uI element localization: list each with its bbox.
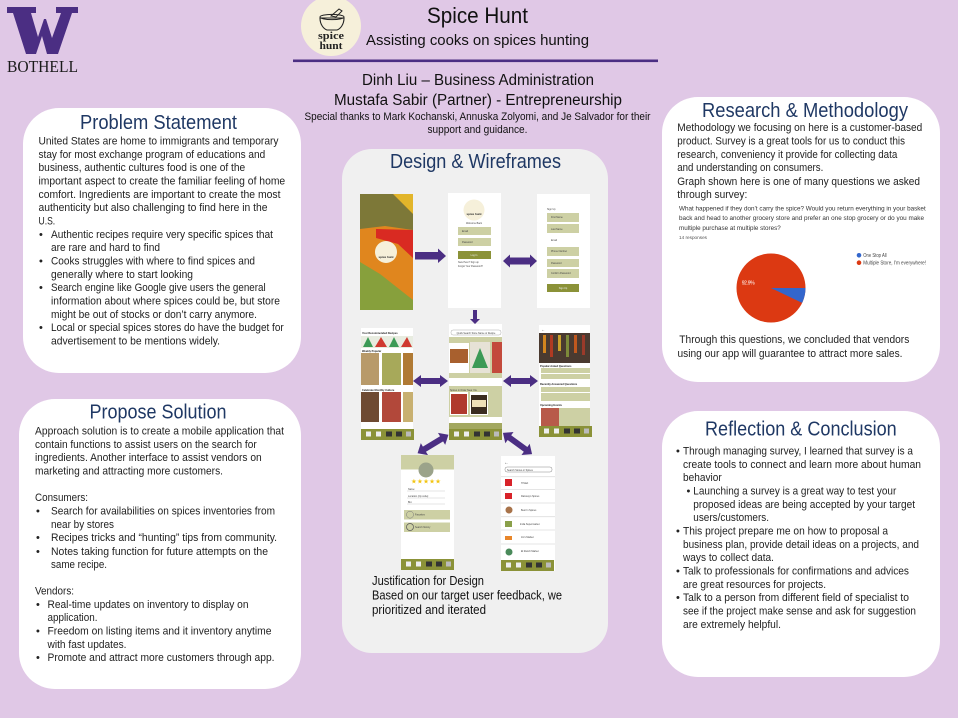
- wireframe: profile screen: Location (zip code):: [408, 495, 429, 498]
- wireframe: profile screen: Name:: [408, 488, 415, 491]
- arrow: recipes to home: [413, 375, 448, 387]
- text: problem statement body: [38, 136, 285, 348]
- text: propose solution body: marketing and attracting more customers.: [35, 466, 223, 478]
- text: problem statement body: Search engine like Google give users the general: [51, 282, 266, 294]
- text: propose solution body: Real-time updates on inventory to display on: [48, 599, 248, 611]
- text: methodology body: research, conveniency it provide for collecting data: [677, 149, 898, 161]
- text: propose solution body: Notes taking function for future attempts on the: [51, 546, 268, 558]
- wireframe: sign up screen: Confirm Password: [551, 272, 571, 275]
- text: propose solution body: ingredients. Another interface to assist vendors on: [35, 452, 262, 464]
- wireframe: home screen: [449, 324, 502, 440]
- text: propose solution body: Approach solution is to create a mobile application that: [35, 426, 284, 438]
- text: propose solution body: Recipes tricks and “hunting” tips from community.: [51, 532, 277, 544]
- text: problem statement body: •: [39, 322, 43, 334]
- wireframe: store list screen: Jin's Market: [521, 536, 534, 539]
- text: problem statement body: generally where to start looking: [51, 269, 193, 281]
- wireframe: recipes screen: Celebrate Monthly Culture: [362, 388, 395, 392]
- wireframe: home screen: Quick Search Store Name or Recipe: [457, 332, 496, 335]
- text: problem statement body: •: [39, 256, 43, 268]
- text: propose solution body: contain functions to assist users on the search for: [35, 439, 257, 451]
- text: propose solution body: [35, 426, 284, 664]
- text: problem statement body: Cooks struggles with where to find spices and: [51, 256, 255, 268]
- text: reflection body: This project prepare me on how to proposal a: [683, 526, 889, 538]
- heading: propose solution: Propose Solution: [90, 402, 226, 424]
- wireframe: sign up screen: Email: [551, 239, 557, 242]
- wireframe: recipes screen: [361, 328, 414, 440]
- text: problem statement body: information about where spices could be, but store: [51, 296, 280, 308]
- text: reflection body: Talk to professionals for confirmations and advices: [683, 566, 909, 578]
- text: propose solution body: same recipe.: [51, 559, 107, 571]
- text: reflection body: Launching a survey is a great way to test your: [693, 486, 897, 498]
- text: reflection body: create tools to connect and learn more about human: [683, 459, 921, 471]
- text: propose solution body: Promote and attract more customers through app.: [48, 652, 274, 664]
- text: problem statement body: stay for most exchange program of educations and: [38, 149, 265, 161]
- subtitle: Assisting cooks on spices hunting: [366, 32, 589, 49]
- text: problem statement body: •: [39, 282, 43, 294]
- chart: survey pie: multiple purchase at multiple stores?: [679, 225, 781, 232]
- wireframe: login screen: New Here? Sign up: [458, 261, 479, 264]
- text: problem statement body: U.S.: [38, 216, 55, 228]
- authors and thanks: support and guidance.: [428, 124, 528, 136]
- text: justification for design: prioritized and iterated: [372, 603, 486, 617]
- panel: propose solution: [19, 399, 301, 689]
- wireframe: login screen: spice hunt: [466, 212, 482, 216]
- text: reflection body: •: [676, 446, 680, 458]
- wireframe: splash screen: spice hunt: [378, 255, 394, 259]
- text: methodology body: Graph shown here is one of many questions we asked: [677, 176, 920, 188]
- wireframe: store list screen: El Ranch Market: [521, 550, 539, 553]
- chart: survey pie: [679, 206, 926, 322]
- wireframe: sign up screen: [537, 194, 590, 308]
- arrow: home to community: [503, 375, 538, 387]
- logo: UW Bothell: [7, 7, 78, 76]
- text: reflection body: •: [676, 526, 680, 538]
- wireframe: login screen: [448, 193, 501, 308]
- text: problem statement body: might be out of stocks or don’t carry anymore.: [51, 309, 257, 321]
- wireframe: community screen: Popular Asked Questions: [540, 364, 572, 368]
- text: problem statement body: authenticity but also challenging to find here in the: [38, 202, 268, 214]
- chart: survey pie: Multiple Store, I'm everywhere!: [863, 260, 926, 266]
- wireframe: sign up screen: Phone Number: [551, 250, 567, 253]
- text: reflection body: ways to collect data.: [682, 552, 774, 564]
- wireframe: home screen: Spices in Order Near You: [450, 389, 478, 392]
- wireframe: sign up screen: Password: [551, 262, 562, 265]
- text: problem statement body: important aspect to create the familiar feeling of home: [38, 176, 285, 188]
- wireframe: sign up screen: Last Name: [551, 228, 563, 231]
- authors and thanks: [304, 72, 651, 136]
- text: methodology body: [677, 122, 922, 201]
- arrow: login to home: [470, 310, 480, 324]
- text: propose solution body: near by stores: [51, 519, 114, 531]
- text: propose solution body: •: [36, 626, 40, 638]
- chart: survey pie: 92.9%: [742, 281, 755, 287]
- text: reflection body: •: [676, 592, 680, 604]
- text: reflection body: •: [686, 486, 690, 498]
- chart: survey pie: One Stop All: [863, 253, 887, 259]
- text: problem statement body: comfort. Ingredients are important to create the most: [38, 189, 280, 201]
- panel: reflection and conclusion: [662, 411, 940, 677]
- wireframe: store list screen: ←: [504, 460, 509, 466]
- text: methodology body: through survey:: [677, 189, 747, 201]
- heading: design and wireframes: Design & Wireframes: [390, 151, 561, 173]
- wireframe: sign up screen: First Name: [551, 216, 563, 219]
- text: reflection body: are great resources for projects.: [683, 579, 826, 591]
- text: reflection body: proposed ideas are being accepted by your target: [693, 499, 915, 511]
- wireframe: login screen: Forgot Your Password?: [458, 265, 484, 268]
- wireframe: recipes screen: Weekly Popular: [362, 349, 381, 353]
- wireframe: login screen: Log In: [471, 254, 478, 257]
- wireframe: login screen: Welcome Back: [466, 222, 483, 225]
- wireframe: profile screen: [401, 455, 454, 570]
- text: propose solution body: •: [36, 532, 40, 544]
- wireframe: community screen: ←: [541, 327, 545, 332]
- wireframe: splash screen: [360, 194, 413, 310]
- arrow: splash to login: [415, 248, 446, 263]
- wireframe: profile screen: ★★★★★: [411, 478, 441, 486]
- chart: survey pie: What happened if they don’t carry the spice? Would you return everything in your basket: [679, 206, 926, 212]
- text: justification for design: Justification for Design: [372, 574, 484, 588]
- wireframe: store list screen: Ramsay's Spices: [521, 495, 540, 498]
- arrow: login to sign up: [503, 254, 537, 268]
- heading: reflection and conclusion: Reflection & Conclusion: [705, 418, 897, 440]
- text: problem statement body: United States are home to immigrants and temporary: [38, 136, 279, 148]
- text: reflection body: see if the project make sense and ask for suggestion: [683, 606, 916, 618]
- chart: survey pie: 14 responses: [679, 235, 708, 241]
- text: propose solution body: Vendors:: [35, 586, 74, 598]
- wireframe: login screen: Password: [462, 241, 473, 244]
- panel: problem statement: [23, 108, 301, 373]
- text: justification for design: [372, 574, 562, 617]
- text: reflection body: Talk to a person from different field of specialist to: [683, 592, 909, 604]
- logo: Spice Hunt: [301, 0, 361, 56]
- text: propose solution body: Freedom on listing items and it inventory anytime: [48, 626, 272, 638]
- text: problem statement body: Local or special spices stores do have the budget for: [51, 322, 284, 334]
- text: reflection body: •: [676, 566, 680, 578]
- wireframe: store list screen: Best In Spices: [521, 509, 537, 512]
- text: propose solution body: •: [36, 652, 40, 664]
- header rule: [293, 60, 658, 62]
- chart: survey pie: back and head to another grocery store and prefer an one stop grocery or do you make: [679, 215, 924, 222]
- text: methodology body: and understanding on consumers.: [677, 162, 823, 174]
- text: methodology body: Methodology we focusing on here is a customer-based: [677, 122, 922, 134]
- authors and thanks: Mustafa Sabir (Partner) - Entrepreneurship: [334, 92, 622, 109]
- logo: Spice Hunt: hunt: [320, 41, 343, 52]
- wireframe: profile screen: Bio:: [408, 501, 412, 504]
- text: reflection body: business plan, provide detail ideas on a projects, and: [683, 539, 919, 551]
- text: reflection body: users/customers.: [693, 512, 769, 524]
- arrow: home to profile: [414, 429, 452, 459]
- wireframe: community screen: Upcoming Events: [540, 403, 562, 407]
- heading: research and methodology: Research & Methodology: [702, 100, 908, 122]
- text: propose solution body: application.: [48, 612, 98, 624]
- text: problem statement body: •: [39, 229, 43, 241]
- panel: research and methodology: [662, 97, 940, 382]
- wireframe: store list screen: H Mart: [521, 482, 529, 485]
- authors and thanks: Dinh Liu – Business Administration: [362, 72, 594, 89]
- wireframe: store list screen: Search Stores or Spices: [507, 469, 534, 472]
- wireframe: community screen: Recently Answered Questions: [540, 382, 578, 386]
- text: reflection body: are extremely helpful.: [683, 619, 781, 631]
- wireframe: store list screen: [501, 456, 555, 571]
- heading: problem statement: Problem Statement: [80, 112, 237, 134]
- panel: design and wireframes: [342, 149, 608, 653]
- wireframe: profile screen: Favorites: [415, 514, 426, 516]
- title: Spice Hunt: [427, 3, 528, 28]
- text: problem statement body: are rare and hard to find: [51, 242, 160, 254]
- arrow: home to stores: [499, 427, 536, 460]
- wireframe: community screen: [539, 325, 592, 437]
- logo: UW Bothell: BOTHELL: [7, 57, 78, 76]
- text: survey conclusion: [678, 334, 910, 360]
- text: survey conclusion: Through this questions, we concluded that vendors: [679, 334, 910, 346]
- text: problem statement body: business, authentic cultures food is one of the: [38, 162, 245, 174]
- text: reflection body: [676, 446, 921, 631]
- wireframe: sign up screen: Sign Up: [547, 208, 556, 211]
- text: propose solution body: •: [36, 506, 40, 518]
- text: methodology body: product. Survey is a great tools for us to conduct this: [677, 136, 905, 148]
- wireframe: profile screen: Search history: [415, 526, 431, 529]
- text: reflection body: behavior: [683, 472, 722, 484]
- text: propose solution body: Search for availabilities on spices inventories from: [51, 506, 275, 518]
- text: propose solution body: with fast updates.: [47, 639, 126, 651]
- wireframe: recipes screen: Your Recommended Recipes: [362, 331, 398, 335]
- text: propose solution body: Consumers:: [35, 492, 88, 504]
- authors and thanks: Special thanks to Mark Kochanski, Annuska Zolyomi, and Je Salvador for their: [304, 111, 651, 123]
- text: justification for design: Based on our target user feedback, we: [372, 588, 562, 602]
- wireframe: sign up screen: Sign Up: [559, 287, 568, 290]
- wireframe: login screen: Email: [462, 230, 468, 233]
- text: reflection body: Through managing survey, I learned that survey is a: [683, 446, 914, 458]
- text: propose solution body: •: [36, 546, 40, 558]
- text: survey conclusion: using our app will guarantee to attract more sales.: [678, 348, 902, 360]
- wireframe: store list screen: India Supermarket: [520, 523, 540, 526]
- logo: Spice Hunt: spice: [318, 31, 345, 42]
- text: problem statement body: Authentic recipes require very specific spices that: [51, 229, 273, 241]
- text: problem statement body: advertisement to be mentions widely.: [51, 336, 220, 348]
- text: propose solution body: •: [36, 599, 40, 611]
